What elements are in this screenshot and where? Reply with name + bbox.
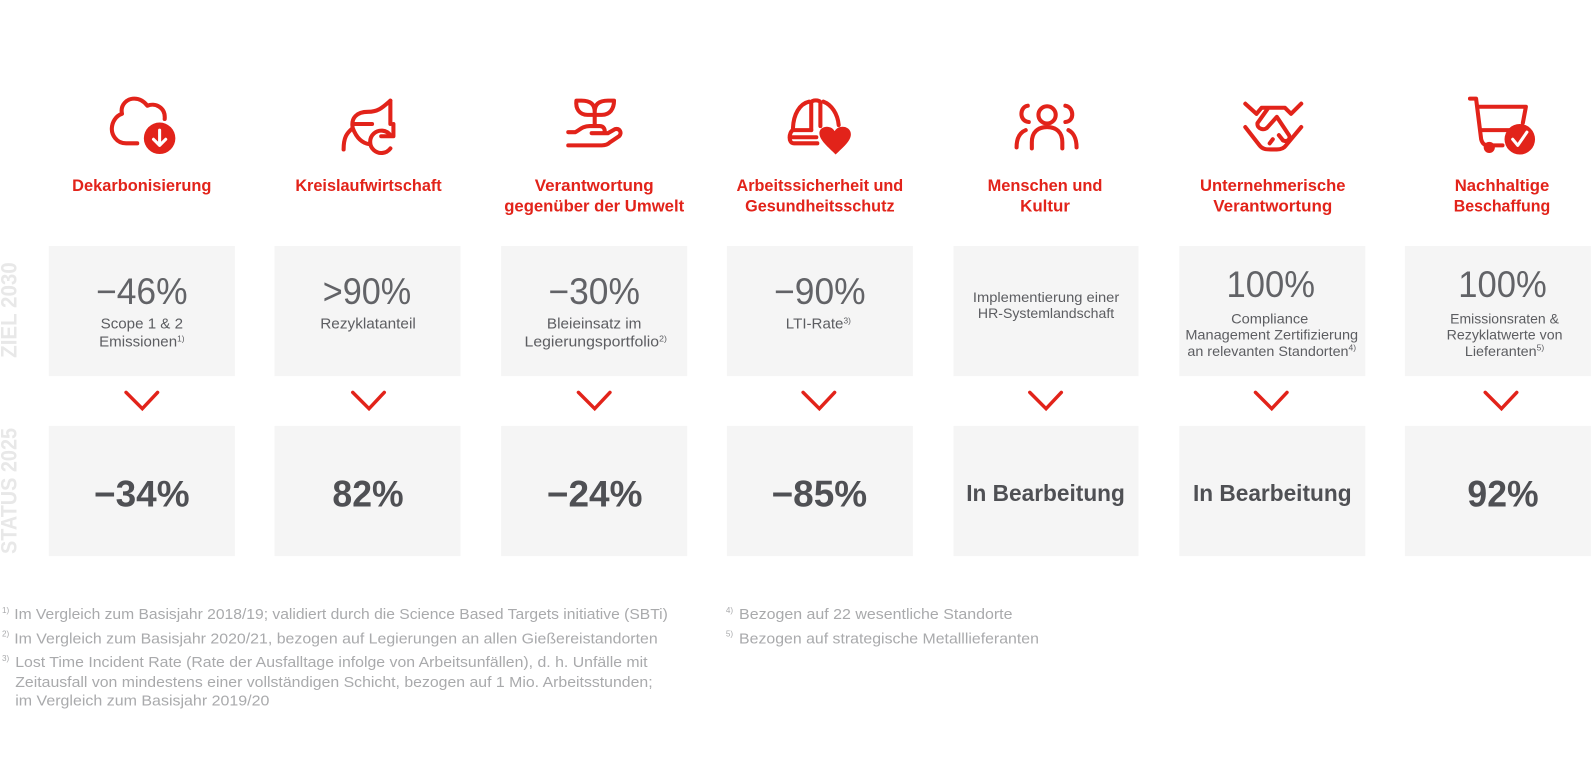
panel: status Dekarbonisierung <box>49 426 235 556</box>
footnotes left: 2) <box>2 629 10 638</box>
icon: seedling on open hand <box>568 101 621 145</box>
icon: cloud with download arrow <box>112 99 175 154</box>
footnotes left: im Vergleich zum Basisjahr 2019/20 <box>15 694 269 710</box>
panel: target Unternehmerische Verantwortung: Management Zertifizierung <box>1185 328 1358 343</box>
panel: target Dekarbonisierung <box>49 246 235 376</box>
heading: Arbeitssicherheit und Gesundheitsschutz: Gesundheitsschutz <box>745 197 895 215</box>
panel: status Menschen und Kultur: In Bearbeitung <box>966 480 1125 506</box>
heading: Nachhaltige Beschaffung: Beschaffung <box>1454 197 1550 215</box>
panel: target Kreislaufwirtschaft: Rezyklatanteil <box>320 316 416 332</box>
arrow: column 4 <box>803 392 835 409</box>
panel: status Arbeitssicherheit: −85% <box>772 473 867 514</box>
panel: target Arbeitssicherheit: 3) <box>843 316 851 325</box>
panel: status Umwelt <box>501 426 687 556</box>
panel: target Menschen und Kultur <box>954 246 1139 376</box>
arrow: column 6 <box>1255 392 1287 409</box>
heading: Verantwortung gegenüber der Umwelt: Verantwortung <box>535 177 654 195</box>
heading: Menschen und Kultur <box>988 177 1102 215</box>
panel: status Kreislaufwirtschaft <box>274 426 461 556</box>
panel: target Umwelt: Bleieinsatz im <box>547 316 641 332</box>
panel: status Unternehmerische Verantwortung <box>1179 426 1365 556</box>
panel: target Kreislaufwirtschaft: >90% <box>323 271 411 312</box>
panel: status Arbeitssicherheit <box>727 426 913 556</box>
footnotes left: Zeitausfall von mindestens einer vollständigen Schicht, bezogen auf 1 Mio. Arbeitsstunden; <box>15 675 653 691</box>
panel: status Unternehmerische Verantwortung: In Bearbeitung <box>1193 480 1352 506</box>
panel: target Kreislaufwirtschaft <box>274 246 461 376</box>
arrow: column 5 <box>1030 392 1061 409</box>
heading: Kreislaufwirtschaft: Kreislaufwirtschaft <box>295 177 442 195</box>
arrow: column 2 <box>353 392 384 409</box>
panel: status Dekarbonisierung: −34% <box>94 473 190 514</box>
arrow: column 3 <box>578 392 610 409</box>
heading: Menschen und Kultur: Menschen und <box>988 177 1102 195</box>
icon: leaf with recycling arrow <box>344 101 393 153</box>
icon: group of people <box>1017 106 1077 148</box>
panel: status Umwelt: −24% <box>547 473 642 514</box>
panel: target Beschaffung: 100% <box>1458 264 1547 305</box>
heading: Unternehmerische Verantwortung: Verantwortung <box>1213 197 1332 215</box>
panel: target Dekarbonisierung: Emissionen <box>99 335 175 351</box>
panel: target Arbeitssicherheit <box>727 246 913 376</box>
footnotes left: 3) <box>2 654 10 663</box>
footnotes left: Im Vergleich zum Basisjahr 2020/21, bezogen auf Legierungen an allen Gießereistandorten <box>14 631 658 647</box>
panel: target Unternehmerische Verantwortung <box>1179 246 1365 376</box>
panel: target Beschaffung <box>1405 246 1591 376</box>
footnotes left: Lost Time Incident Rate (Rate der Ausfalltage infolge von Arbeitsunfällen), d. h. Unfälle mit <box>15 655 648 671</box>
heading: Arbeitssicherheit und Gesundheitsschutz <box>737 177 903 215</box>
heading: Arbeitssicherheit und Gesundheitsschutz: Arbeitssicherheit und <box>737 177 903 195</box>
heading: Menschen und Kultur: Kultur <box>1020 197 1071 215</box>
panel: status Kreislaufwirtschaft: 82% <box>332 473 404 514</box>
icon: shopping cart with check <box>1470 99 1535 155</box>
panel: target Beschaffung: 5) <box>1537 344 1544 353</box>
footnotes right: 5) <box>726 629 733 638</box>
heading: Unternehmerische Verantwortung: Unternehmerische <box>1200 177 1345 195</box>
icon: safety helmet with heart <box>790 100 851 155</box>
panel: status Beschaffung: 92% <box>1467 473 1539 514</box>
footnotes right: Bezogen auf 22 wesentliche Standorte <box>739 607 1013 623</box>
heading: Dekarbonisierung: Dekarbonisierung <box>72 177 211 195</box>
heading: Nachhaltige Beschaffung: Nachhaltige <box>1455 177 1549 195</box>
panel: target Umwelt: 2) <box>659 335 667 344</box>
panel: target Beschaffung: Emissionsraten & <box>1450 311 1559 326</box>
panel: target Beschaffung: Lieferanten <box>1465 344 1534 359</box>
heading: Unternehmerische Verantwortung <box>1200 177 1345 215</box>
panel: status Beschaffung <box>1405 426 1591 556</box>
footnotes left <box>2 606 668 710</box>
panel: target Umwelt <box>501 246 687 376</box>
panel: target Arbeitssicherheit: LTI-Rate <box>786 316 842 332</box>
icon: handshake <box>1245 104 1301 149</box>
panel: target Unternehmerische Verantwortung: an relevanten Standorten <box>1187 344 1341 359</box>
panel: target Unternehmerische Verantwortung: 100% <box>1227 264 1315 305</box>
heading: Verantwortung gegenüber der Umwelt: gegenüber der Umwelt <box>504 197 685 215</box>
panel: target Umwelt: Legierungsportfolio <box>525 335 650 351</box>
footnotes left: 1) <box>2 606 10 615</box>
footnotes right: Bezogen auf strategische Metalllieferanten <box>739 631 1039 647</box>
arrow: column 1 <box>126 392 158 409</box>
panel: target Dekarbonisierung: 1) <box>177 335 185 344</box>
panel: target Menschen und Kultur: Implementierung einer <box>973 290 1120 305</box>
heading: Nachhaltige Beschaffung <box>1454 177 1550 215</box>
panel: target Dekarbonisierung: −46% <box>96 271 188 312</box>
panel: target Unternehmerische Verantwortung: Compliance <box>1231 311 1309 326</box>
panel: target Beschaffung: Rezyklatwerte von <box>1447 328 1562 343</box>
panel: target Menschen und Kultur: HR-Systemlandschaft <box>978 306 1114 321</box>
panel: target Umwelt: −30% <box>548 271 640 312</box>
footnotes right <box>726 606 1039 647</box>
footnotes left: Im Vergleich zum Basisjahr 2018/19; validiert durch die Science Based Targets initiative (SBTi) <box>14 607 668 623</box>
heading: Verantwortung gegenüber der Umwelt <box>504 177 685 215</box>
panel: target Unternehmerische Verantwortung: 4) <box>1349 344 1356 353</box>
panel: target Dekarbonisierung: Scope 1 & 2 <box>101 316 183 332</box>
footnotes right: 4) <box>726 606 733 615</box>
panel: target Arbeitssicherheit: −90% <box>774 271 866 312</box>
arrow: column 7 <box>1485 392 1517 409</box>
panel: status Menschen und Kultur <box>954 426 1139 556</box>
